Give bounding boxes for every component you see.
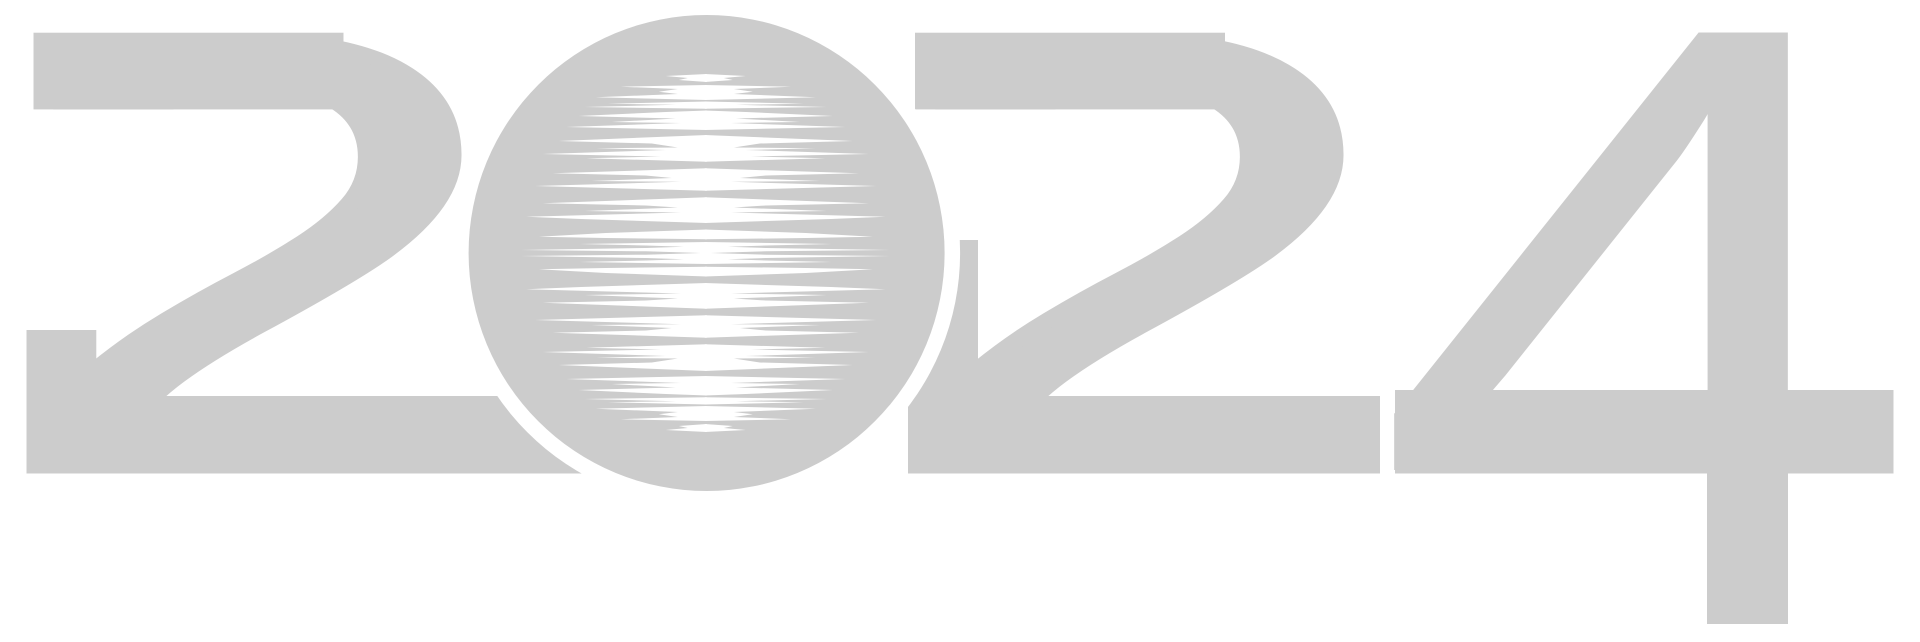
emblem: striped globe as the digit 0 <box>469 15 945 491</box>
halo around the emblem <box>453 0 960 506</box>
